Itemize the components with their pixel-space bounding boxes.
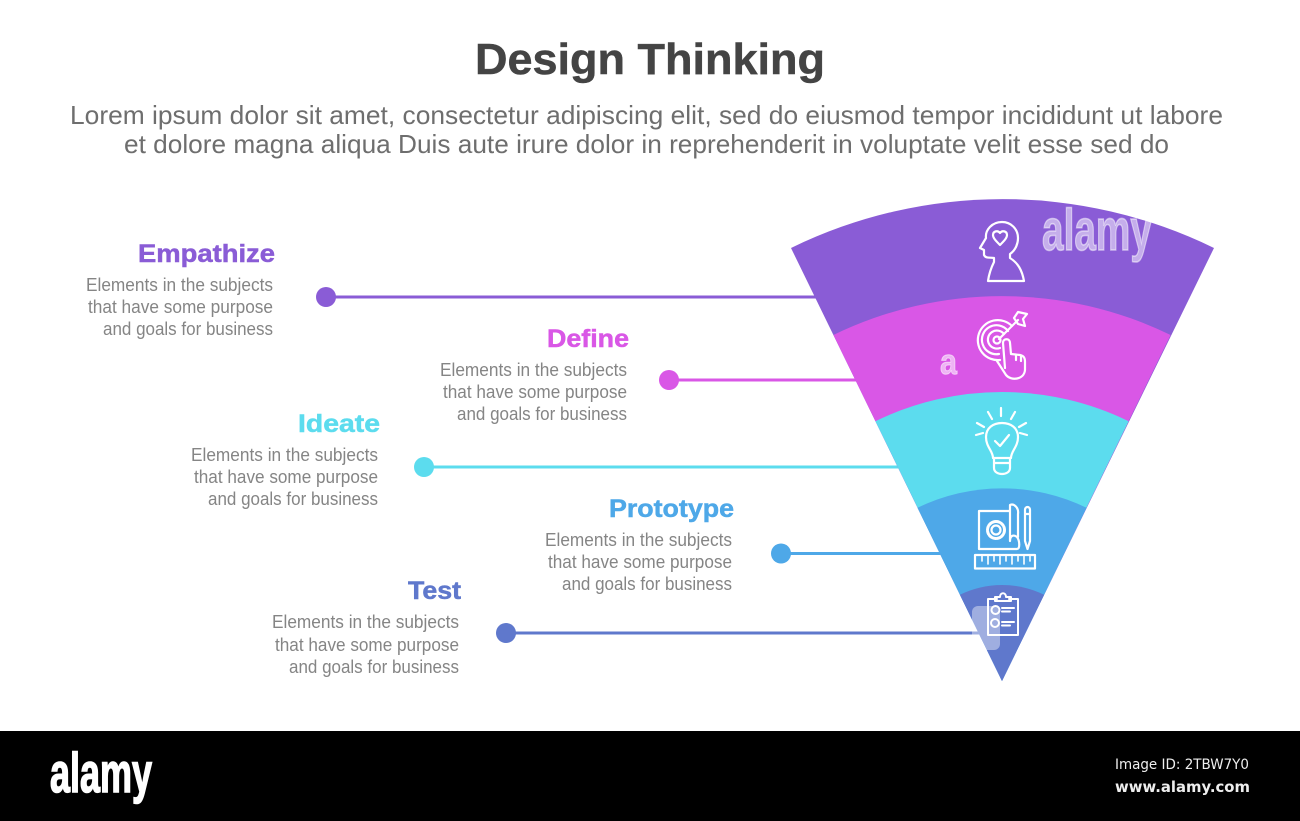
label: test: that have some purpose [275,635,459,655]
label: test: Elements in the subjects [272,612,459,632]
label: prototype: Elements in the subjects [545,530,732,550]
label: empathize: that have some purpose [88,297,273,317]
funnel chart [791,199,1214,681]
label: define: and goals for business [457,404,627,424]
icon: target with hand [978,312,1027,379]
subtitle: et dolore magna aliqua Duis aute irure dolor in reprehenderit in voluptate velit esse sed do [124,129,1169,159]
icon: blueprint, gear, pencil and ruler [975,505,1035,568]
label: empathize: and goals for business [103,319,273,339]
label: ideate: Ideate [298,410,380,438]
footer image id: Image ID: 2TBW7Y0 [1115,757,1249,773]
footer url: www.alamy.com [1115,778,1250,796]
connector: prototype [771,544,943,564]
label: ideate: that have some purpose [194,467,378,487]
label: define: Define [547,325,629,353]
label: prototype [545,495,734,594]
label: test: Test [408,577,462,605]
segment: prototype [918,488,1086,681]
label: define: Elements in the subjects [440,360,627,380]
watermark: bottom band letter [972,606,1000,650]
footer bar [0,731,1300,821]
icon: light bulb with check [976,408,1027,474]
label: ideate: Elements in the subjects [191,445,378,465]
subtitle [70,100,1223,159]
footer logo: alamy [50,741,152,804]
icon: clipboard checklist [988,593,1018,635]
label: empathize: Elements in the subjects [86,275,273,295]
icon: head with heart [980,222,1024,281]
label: prototype: Prototype [609,495,734,523]
segment: test [960,585,1044,681]
title: Design Thinking [475,35,825,84]
label: test [272,577,462,677]
connector: define [659,370,858,390]
watermark: second band letter: a [940,341,958,382]
label: empathize [86,240,275,339]
label: ideate: and goals for business [208,489,378,509]
label: define [440,325,629,424]
label: test: and goals for business [289,657,459,677]
label: ideate [191,410,380,509]
segment: define [833,296,1171,681]
label: define: that have some purpose [443,382,627,402]
segment: empathize [791,199,1214,681]
label: prototype: and goals for business [562,574,732,594]
connector: test [496,623,985,643]
label: empathize: Empathize [138,240,275,268]
connector: ideate [414,457,900,477]
subtitle: Lorem ipsum dolor sit amet, consectetur adipiscing elit, sed do eiusmod tempor incididunt ut labore [70,100,1223,130]
watermark: top band: alamy [1042,198,1152,263]
segment: ideate [875,392,1129,681]
connector: empathize [316,287,818,307]
label: prototype: that have some purpose [548,552,732,572]
